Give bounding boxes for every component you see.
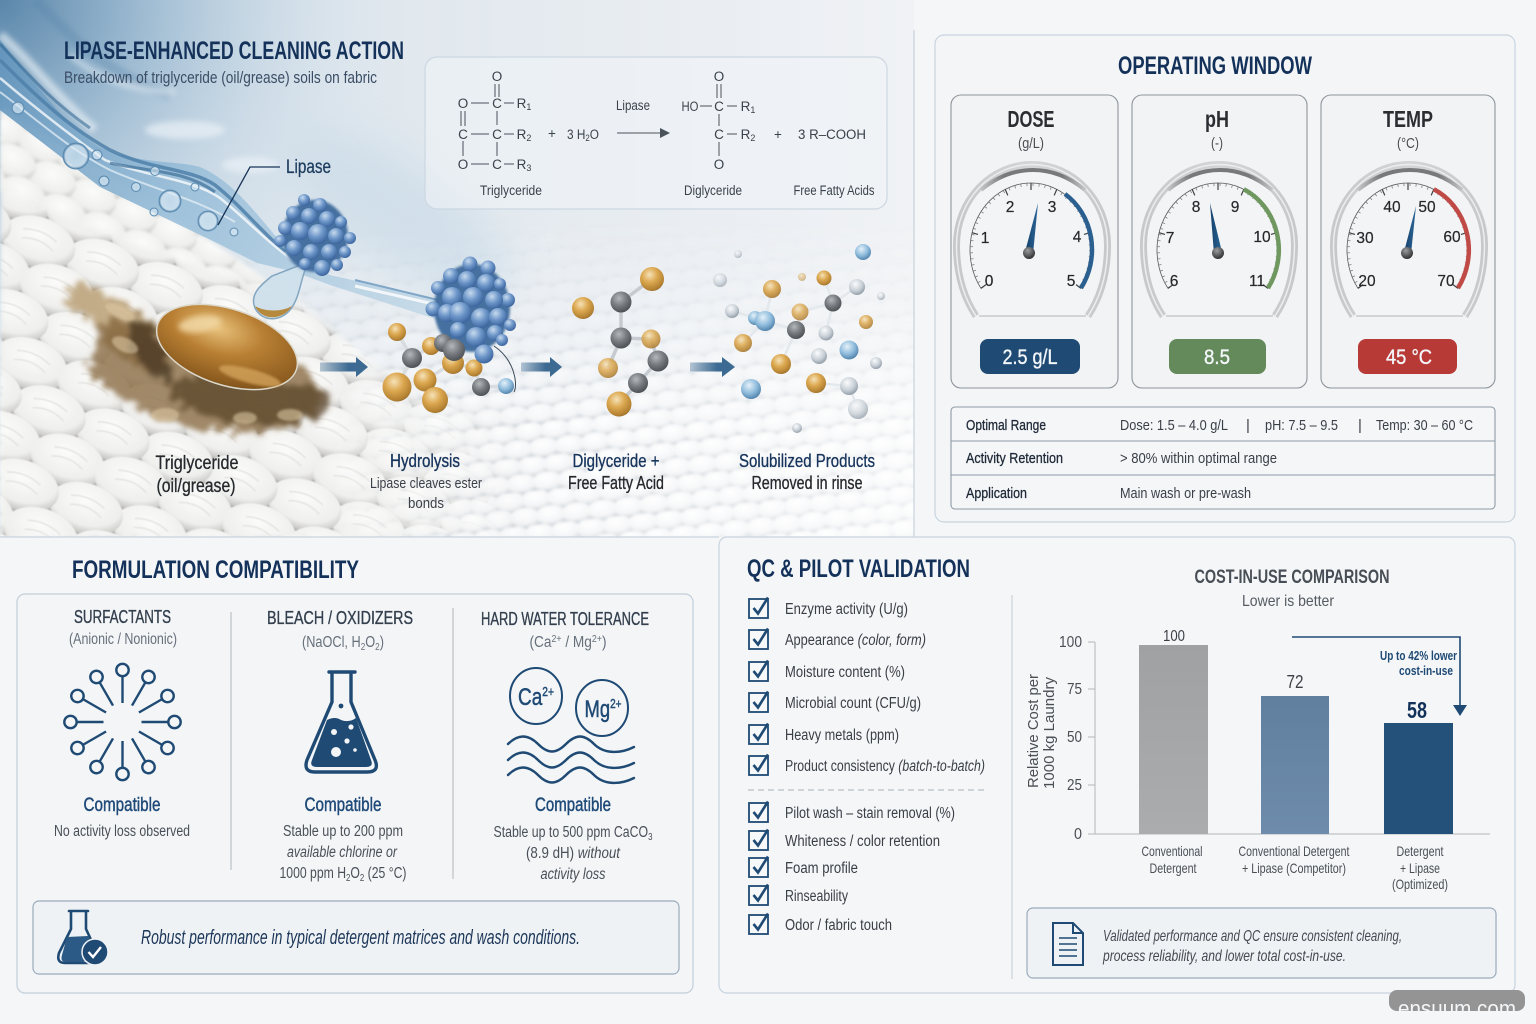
gauge card: dose: 0 bbox=[985, 273, 994, 290]
panel: reaction equation: O bbox=[458, 96, 468, 111]
column: hard water tolerance: Stable up to 500 ppm CaCO bbox=[494, 824, 688, 841]
panel: reaction equation: Diglyceride bbox=[684, 183, 742, 198]
icon: calcium and magnesium ions over water: Mg bbox=[584, 696, 618, 723]
column: surfactants bbox=[54, 607, 190, 840]
label: hydrolysis: Hydrolysis bbox=[390, 450, 460, 471]
table: operating ranges: > 80% within optimal range bbox=[1120, 450, 1277, 467]
bar: conventional detergent bbox=[1139, 628, 1208, 876]
callout: robust performance bbox=[33, 901, 679, 974]
arrow: products to rinse bbox=[690, 357, 735, 377]
column: bleach / oxidizers: Compatible bbox=[304, 795, 382, 816]
gauge card: pH bbox=[1132, 95, 1307, 388]
checklist: QC tests: Moisture content (%) bbox=[785, 664, 905, 681]
panel: reaction equation: C bbox=[492, 96, 502, 111]
chart: cost-in-use comparison: 25 bbox=[1067, 777, 1082, 794]
column: hard water tolerance: 2+ bbox=[552, 634, 562, 645]
bar: detergent plus lipase optimized: Detergent bbox=[1396, 843, 1444, 859]
panel: reaction equation: 3 R–COOH bbox=[798, 127, 866, 142]
bar: conventional detergent: Conventional bbox=[1142, 843, 1202, 859]
heading: formulation compatibility: FORMULATION COMPATIBILITY bbox=[72, 556, 359, 584]
gauge card: pH: 9 bbox=[1231, 199, 1239, 216]
column: hard water tolerance bbox=[481, 609, 653, 883]
callout: robust performance: Robust performance in typical detergent matrices and wash conditions. bbox=[141, 927, 580, 949]
icon: surfactant micelle bbox=[64, 664, 181, 780]
chart: cost-in-use comparison: 50 bbox=[1067, 729, 1082, 746]
oil droplet bbox=[146, 288, 308, 406]
panel: reaction equation: + bbox=[548, 126, 556, 141]
diglyceride and fatty acid molecule bbox=[572, 267, 668, 416]
chart: cost-in-use comparison: Lower is better bbox=[1242, 593, 1335, 610]
column: bleach / oxidizers: O bbox=[365, 634, 375, 651]
lipase callout bbox=[218, 157, 331, 225]
bar: conventional detergent: 100 bbox=[1163, 628, 1185, 645]
panel: lipase cleaning action illustration bbox=[0, 0, 914, 537]
checklist: pilot tests bbox=[749, 802, 955, 934]
gauge card: pH: 8 bbox=[1192, 199, 1200, 216]
y axis label: Relative Cost per bbox=[1026, 674, 1042, 788]
panel: reaction equation: C bbox=[458, 127, 468, 142]
panel: reaction equation: 3 H bbox=[567, 127, 588, 142]
bar: detergent plus lipase optimized bbox=[1384, 697, 1453, 892]
gauge card: temp: 40 bbox=[1383, 199, 1401, 216]
checklist: pilot tests: Odor / fabric touch bbox=[785, 917, 892, 934]
gauge card: pH: 11 bbox=[1249, 273, 1265, 290]
panel: reaction equation: O bbox=[714, 157, 724, 172]
panel: reaction equation: 2 bbox=[526, 133, 531, 143]
panel: reaction equation: O bbox=[714, 69, 724, 84]
column: bleach / oxidizers: Stable up to 200 ppm bbox=[283, 823, 403, 840]
column: hard water tolerance: 2+ bbox=[592, 634, 602, 645]
icon: document bbox=[1053, 923, 1083, 965]
gauge card: temp: (°C) bbox=[1397, 135, 1419, 152]
panel: reaction equation: HO bbox=[682, 99, 698, 114]
bar: detergent plus lipase optimized: + Lipase bbox=[1400, 860, 1440, 876]
panel: reaction equation: O bbox=[458, 157, 468, 172]
table: operating ranges: Application bbox=[966, 485, 1027, 502]
heading: lipase-enhanced cleaning action: LIPASE-ENHANCED CLEANING ACTION bbox=[64, 37, 404, 65]
checklist: pilot tests: Foam profile bbox=[785, 860, 858, 877]
chart: cost-in-use comparison: 100 bbox=[1059, 634, 1082, 651]
bar: conventional detergent plus lipase bbox=[1238, 672, 1350, 876]
panel: reaction equation: C bbox=[714, 127, 724, 142]
heading: operating window: OPERATING WINDOW bbox=[1118, 52, 1312, 80]
column: surfactants: SURFACTANTS bbox=[74, 607, 171, 627]
panel: reaction equation: R bbox=[517, 157, 526, 172]
bar: conventional detergent: Detergent bbox=[1150, 860, 1197, 876]
checklist: QC tests: Heavy metals (ppm) bbox=[785, 727, 899, 744]
panel: reaction equation: 2 bbox=[750, 133, 755, 143]
gauge card: temp: TEMP bbox=[1383, 106, 1433, 132]
panel: operating window bbox=[935, 35, 1515, 522]
checklist: QC tests: Microbial count (CFU/g) bbox=[785, 695, 921, 712]
checklist: QC tests: Enzyme activity (U/g) bbox=[785, 601, 908, 618]
label: solubilized products: Solubilized Products bbox=[739, 450, 875, 471]
chart: cost-in-use comparison: 75 bbox=[1067, 681, 1082, 698]
icon: calcium and magnesium ions over water: 2+ bbox=[610, 696, 622, 711]
panel: reaction equation: C bbox=[492, 127, 502, 142]
panel: reaction equation: R bbox=[741, 127, 750, 142]
callout arrow: up to 42% lower: cost-in-use bbox=[1399, 663, 1453, 678]
gauge card: dose: (g/L) bbox=[1018, 135, 1044, 152]
table: operating ranges bbox=[951, 407, 1495, 509]
gauge card: pH: (-) bbox=[1211, 135, 1223, 152]
label: diglyceride + free fatty acid: Free Fatty Acid bbox=[568, 472, 664, 493]
lipase droplet touching oil bbox=[253, 262, 308, 319]
table: operating ranges: Dose: 1.5 – 4.0 g/L bbox=[1120, 417, 1228, 434]
panel: reaction equation: Triglyceride bbox=[480, 183, 542, 198]
checklist: pilot tests: Pilot wash – stain removal (%) bbox=[785, 805, 955, 822]
column: bleach / oxidizers: (NaOCl, H bbox=[302, 634, 373, 651]
column: bleach / oxidizers: O bbox=[350, 865, 360, 882]
arrow: hydrolysis to products bbox=[521, 357, 562, 377]
gauge card: pH: 6 bbox=[1170, 273, 1178, 290]
gauge card: pH: pH bbox=[1205, 106, 1229, 132]
panel: reaction equation: R bbox=[741, 99, 750, 114]
gauge card: temp bbox=[1321, 95, 1495, 388]
column: bleach / oxidizers: 2 bbox=[375, 642, 380, 653]
active-site atoms bbox=[434, 334, 465, 361]
panel: reaction equation: Lipase bbox=[616, 98, 650, 113]
y axis label: 1000 kg Laundry bbox=[1042, 676, 1058, 789]
column: hard water tolerance: HARD WATER TOLERANCE bbox=[481, 609, 649, 629]
water stream bbox=[0, 40, 445, 322]
table: operating ranges: Activity Retention bbox=[966, 450, 1063, 467]
column: hard water tolerance: ) bbox=[602, 634, 606, 651]
panel: reaction equation: C bbox=[492, 157, 502, 172]
solubilized product molecules bbox=[713, 244, 885, 433]
haze streaks bbox=[0, 0, 278, 173]
checklist: QC tests: Appearance (color, form) bbox=[785, 632, 926, 649]
gauge card: temp: 60 bbox=[1443, 229, 1461, 246]
panel: reaction equation bbox=[425, 57, 887, 209]
gauge card: pH: 10 bbox=[1253, 229, 1271, 246]
gauge card: temp: 45 °C bbox=[1386, 346, 1432, 369]
subheading: Breakdown of triglyceride (oil/grease) soils on fabric bbox=[64, 68, 377, 87]
column: bleach / oxidizers: (25 °C) bbox=[364, 865, 406, 882]
column: hard water tolerance: activity loss bbox=[540, 866, 606, 883]
panel: reaction equation: 2 bbox=[585, 133, 590, 143]
label: triglyceride: Triglyceride bbox=[156, 453, 238, 474]
label: hydrolysis: bonds bbox=[408, 495, 444, 512]
gauge card: dose bbox=[951, 95, 1118, 388]
soil stain on fabric bbox=[56, 274, 331, 451]
table: operating ranges: Optimal Range bbox=[966, 417, 1046, 434]
bar: detergent plus lipase optimized: (Optimized) bbox=[1392, 876, 1448, 892]
chart: cost-in-use comparison: COST-IN-USE COMPARISON bbox=[1194, 567, 1390, 588]
heading: QC and pilot validation: QC & PILOT VALIDATION bbox=[747, 555, 970, 583]
column: bleach / oxidizers bbox=[267, 608, 413, 884]
gauge card: dose: DOSE bbox=[1008, 106, 1054, 132]
gauge card: temp: 30 bbox=[1356, 230, 1374, 247]
label: solubilized products bbox=[739, 450, 875, 493]
panel: QC and pilot validation bbox=[719, 537, 1515, 993]
column: bleach / oxidizers: 2 bbox=[346, 873, 351, 884]
panel: reaction equation: R bbox=[517, 96, 526, 111]
gauge card: temp: 50 bbox=[1418, 199, 1436, 216]
hydrolysis molecule bonds and atoms bbox=[382, 323, 516, 413]
checklist: QC tests: Product consistency (batch-to-batch) bbox=[785, 758, 985, 775]
arrow: triglyceride to hydrolysis bbox=[320, 357, 368, 377]
panel: reaction equation: C bbox=[714, 99, 724, 114]
callout: validated performance: process reliability, and lower total cost-in-use. bbox=[1102, 948, 1346, 965]
bar: conventional detergent plus lipase: 72 bbox=[1286, 672, 1304, 692]
panel: reaction equation: + bbox=[774, 127, 782, 142]
icon: calcium and magnesium ions over water bbox=[508, 668, 634, 783]
checklist: QC tests bbox=[749, 598, 985, 775]
panel: reaction equation: 1 bbox=[526, 102, 531, 112]
watermark: ensuum.com bbox=[1398, 996, 1516, 1021]
gauge card: dose: 1 bbox=[981, 230, 989, 247]
column: surfactants: No activity loss observed bbox=[54, 823, 190, 840]
column: hard water tolerance: / Mg bbox=[562, 634, 592, 651]
column: hard water tolerance: 3 bbox=[648, 832, 653, 843]
gauge card: dose: 5 bbox=[1067, 273, 1075, 290]
checklist: pilot tests: Rinseability bbox=[785, 888, 848, 905]
panel: reaction equation: O bbox=[492, 69, 502, 84]
bar: conventional detergent plus lipase: + Lipase (Competitor) bbox=[1242, 860, 1346, 876]
gauge card: pH: 8.5 bbox=[1204, 346, 1230, 369]
label: triglyceride: (oil/grease) bbox=[156, 476, 236, 497]
bar: conventional detergent plus lipase: Conventional Detergent bbox=[1238, 843, 1350, 859]
column: surfactants: (Anionic / Nonionic) bbox=[69, 631, 177, 648]
gauge card: dose: 2 bbox=[1006, 199, 1014, 216]
panel: reaction equation: 3 bbox=[526, 163, 531, 173]
label: hydrolysis bbox=[370, 450, 482, 512]
bar: detergent plus lipase optimized: 58 bbox=[1407, 697, 1427, 723]
water bubbles bbox=[12, 102, 238, 236]
enzyme: lipase acting on bond bbox=[426, 256, 516, 364]
table: operating ranges: Main wash or pre-wash bbox=[1120, 485, 1251, 502]
gauge card: temp: 20 bbox=[1358, 273, 1376, 290]
y axis label bbox=[1026, 674, 1058, 789]
column: bleach / oxidizers: available chlorine or bbox=[287, 844, 398, 861]
column: bleach / oxidizers: 1000 ppm H bbox=[280, 865, 364, 882]
panel: reaction equation: Free Fatty Acids bbox=[794, 183, 875, 198]
chart: cost-in-use comparison: 0 bbox=[1074, 826, 1082, 843]
gauge card: pH: 7 bbox=[1166, 230, 1174, 247]
label: diglyceride + free fatty acid bbox=[568, 450, 664, 493]
column: bleach / oxidizers: 2 bbox=[361, 642, 366, 653]
table: operating ranges: Temp: 30 – 60 °C bbox=[1376, 417, 1473, 434]
callout arrow: up to 42% lower bbox=[1292, 637, 1467, 716]
label: triglyceride bbox=[156, 453, 238, 497]
column: bleach / oxidizers: 2 bbox=[360, 873, 365, 884]
hero frame lines bbox=[0, 30, 914, 537]
column: surfactants: Compatible bbox=[84, 795, 160, 816]
icon: flask with check bbox=[58, 911, 108, 965]
panel: reaction equation: O bbox=[590, 127, 599, 142]
callout: validated performance: Validated performance and QC ensure consistent cleaning, bbox=[1103, 928, 1402, 945]
panel: reaction equation: 1 bbox=[750, 105, 755, 115]
checklist: pilot tests: Whiteness / color retention bbox=[785, 833, 940, 850]
column: bleach / oxidizers: BLEACH / OXIDIZERS bbox=[267, 608, 413, 628]
callout: validated performance bbox=[1027, 908, 1496, 978]
table: operating ranges: | bbox=[1246, 417, 1250, 434]
panel: reaction equation: R bbox=[517, 127, 526, 142]
lipase callout: Lipase bbox=[286, 157, 331, 178]
icon: calcium and magnesium ions over water: Ca bbox=[518, 684, 549, 711]
gauge card: dose: 3 bbox=[1048, 199, 1056, 216]
column: hard water tolerance: Compatible bbox=[535, 795, 611, 816]
label: solubilized products: Removed in rinse bbox=[752, 472, 862, 493]
icon: flask bbox=[306, 672, 376, 772]
label: hydrolysis: Lipase cleaves ester bbox=[370, 475, 482, 492]
column: hard water tolerance: (8.9 dH) without bbox=[526, 845, 621, 862]
gauge card: dose: 2.5 g/L bbox=[1002, 346, 1058, 369]
panel: formulation compatibility bbox=[17, 594, 693, 993]
callout arrow: up to 42% lower: Up to 42% lower bbox=[1380, 648, 1457, 663]
chart: cost-in-use comparison bbox=[1026, 567, 1490, 892]
gauge card: dose: 4 bbox=[1073, 229, 1082, 246]
table: operating ranges: pH: 7.5 – 9.5 bbox=[1265, 417, 1338, 434]
gauge card: temp: 70 bbox=[1437, 273, 1455, 290]
label: diglyceride + free fatty acid: Diglyceride + bbox=[572, 450, 660, 471]
table: operating ranges: | bbox=[1358, 417, 1362, 434]
enzyme: lipase (free) bbox=[274, 194, 356, 276]
icon: calcium and magnesium ions over water: 2+ bbox=[542, 684, 554, 699]
column: bleach / oxidizers: ) bbox=[380, 634, 384, 651]
column: hard water tolerance: (Ca bbox=[530, 634, 554, 651]
